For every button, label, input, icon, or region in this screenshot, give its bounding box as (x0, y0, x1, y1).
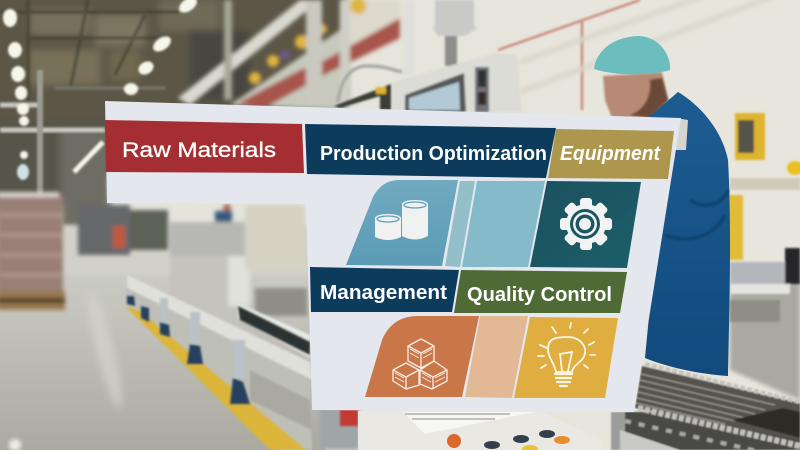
signboard (105, 101, 688, 412)
header: Management: Management (320, 281, 447, 304)
icon: stacked crates (393, 339, 447, 389)
header: Production Optimization: Production Optimization (320, 142, 547, 165)
panel: light teal (462, 181, 545, 267)
panel: management boxes (365, 316, 479, 397)
header: Raw Materials: Raw Materials (122, 138, 276, 162)
machine head and screen (334, 0, 522, 112)
header: Management (310, 267, 459, 312)
header: Production Optimization (305, 124, 556, 178)
sign panel (105, 101, 681, 412)
header: Equipment (548, 129, 674, 179)
right wall equipment (727, 113, 800, 322)
header: Quality Control: Quality Control (467, 283, 612, 306)
icon: light bulb (538, 323, 595, 386)
panel: peach strip (465, 316, 528, 398)
background machines (78, 204, 307, 316)
sign clip (672, 118, 688, 150)
panel: idea bulb (514, 317, 618, 398)
panel: narrow teal strip (445, 181, 475, 267)
header: Equipment: Equipment (560, 142, 661, 165)
control box (358, 411, 602, 450)
ceiling (0, 0, 345, 230)
red pipes on wall (498, 0, 640, 110)
floor (0, 245, 325, 450)
icon: gear (560, 198, 612, 250)
conveyor with yellow floor line (125, 275, 360, 450)
upper structure with coloured parts (178, 0, 415, 110)
panel: raw materials cylinders (346, 180, 458, 266)
panel: equipment gear (530, 181, 641, 268)
pallet of material (0, 192, 65, 310)
header: Quality Control (454, 270, 627, 313)
ceiling beams and lights (0, 0, 200, 200)
foreground conveyor rollers (611, 364, 800, 450)
header: Raw Materials (105, 120, 304, 173)
icon: cylinders (375, 200, 428, 240)
worker (594, 36, 730, 376)
